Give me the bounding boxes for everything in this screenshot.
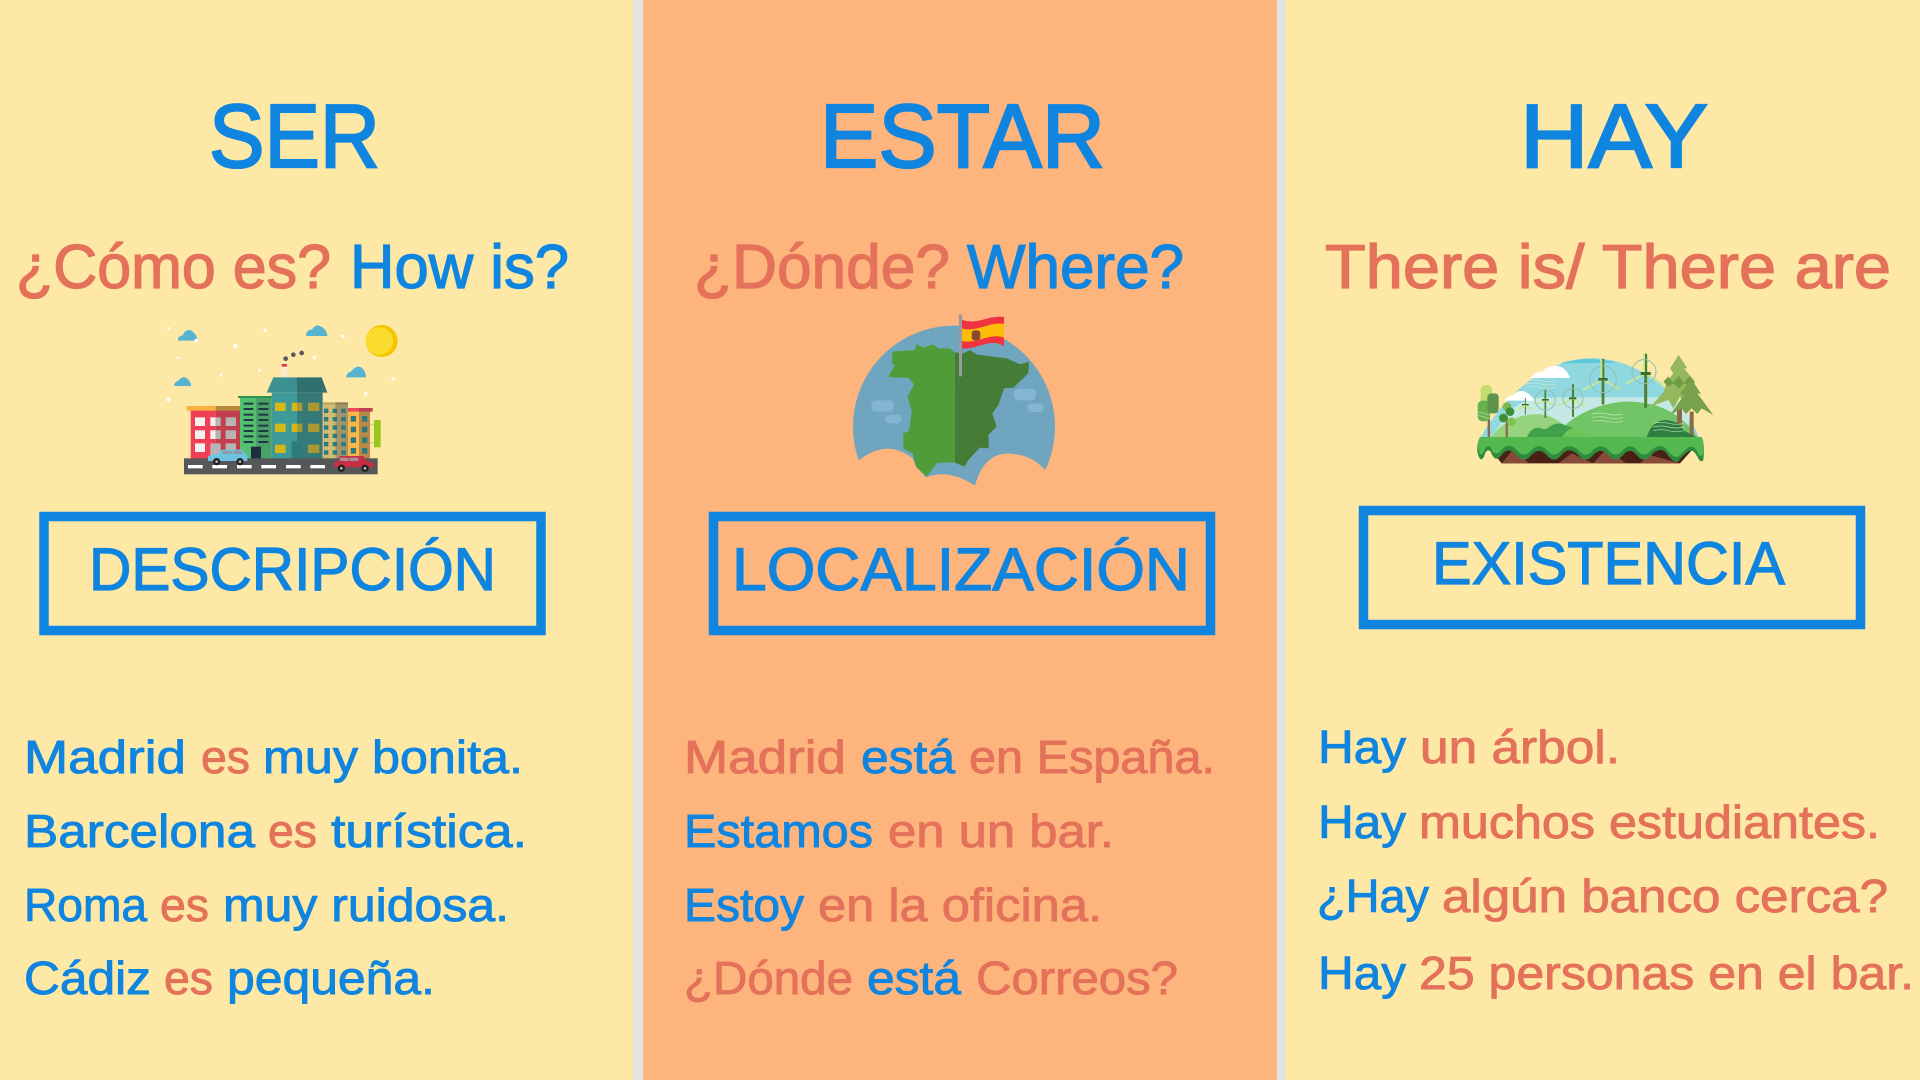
- wavy lines: [1469, 380, 1684, 432]
- examples: ser: es: [268, 805, 317, 857]
- examples: estar: ¿Dónde: [684, 952, 853, 1004]
- examples: estar: está: [861, 731, 955, 783]
- examples: ser: Cádiz: [24, 952, 151, 1004]
- examples: hay: Hay: [1318, 721, 1406, 773]
- grass top: [1477, 437, 1704, 462]
- question: where: Where?: [967, 233, 1184, 302]
- label box: localizacion: [714, 516, 1210, 630]
- label box: descripcion: [44, 516, 541, 630]
- question: where: [694, 233, 1184, 302]
- examples: estar: en España.: [969, 731, 1215, 783]
- label box: descripcion: DESCRIPCIÓN: [89, 536, 496, 603]
- label box: existencia: EXISTENCIA: [1432, 530, 1785, 597]
- examples: ser: pequeña.: [227, 952, 435, 1004]
- question: how is: How is?: [350, 233, 569, 302]
- icon: spain globe: [843, 314, 1063, 535]
- examples: ser: Barcelona: [24, 805, 255, 857]
- panel: estar: [643, 0, 1277, 1080]
- title: SER: SER: [209, 87, 380, 187]
- label box: localizacion: LOCALIZACIÓN: [732, 536, 1190, 603]
- examples: hay: 25 personas en el bar.: [1419, 947, 1914, 999]
- examples: ser: turística.: [331, 805, 527, 857]
- left trees: [1488, 410, 1490, 438]
- examples: ser: Madrid: [24, 731, 186, 783]
- title: HAY: HAY: [1520, 87, 1708, 187]
- examples: ser: es: [164, 952, 213, 1004]
- examples: hay: muchos estudiantes.: [1419, 796, 1880, 848]
- examples: estar: [684, 731, 1215, 1004]
- icon: city: [166, 325, 398, 474]
- blue car: [208, 450, 247, 461]
- examples: estar: en la oficina.: [818, 879, 1102, 931]
- examples: ser: muy bonita.: [263, 731, 523, 783]
- panel: ser: [0, 0, 633, 1080]
- divider left: [633, 0, 643, 1080]
- red building: [191, 410, 216, 459]
- examples: estar: Madrid: [684, 731, 846, 783]
- examples: hay: Hay: [1318, 796, 1406, 848]
- panel: hay: [1286, 0, 1920, 1080]
- examples: estar: Estamos: [684, 805, 873, 857]
- question: where: ¿Dónde?: [694, 233, 950, 302]
- question: how is: ¿Cómo es?: [16, 233, 331, 302]
- examples: ser: es: [160, 879, 209, 931]
- soil: [1488, 447, 1695, 463]
- examples: ser: es: [201, 731, 250, 783]
- examples: hay: ¿Hay: [1317, 870, 1429, 922]
- red car: [334, 456, 374, 467]
- teal building: [272, 393, 297, 459]
- divider right: [1277, 0, 1286, 1080]
- bushes: [1527, 423, 1591, 438]
- orange building: [348, 411, 359, 459]
- label box: existencia: [1364, 510, 1860, 624]
- icon: green landscape: [1469, 354, 1713, 463]
- examples: ser: [24, 731, 527, 1004]
- examples: hay: [1317, 721, 1914, 999]
- green building: [240, 397, 256, 459]
- tan building: [323, 404, 335, 459]
- title: ESTAR: ESTAR: [820, 87, 1105, 187]
- examples: hay: un árbol.: [1420, 721, 1620, 773]
- examples: estar: está: [867, 952, 961, 1004]
- examples: ser: muy ruidosa.: [223, 879, 509, 931]
- pine trees: [1677, 408, 1682, 438]
- examples: estar: en un bar.: [888, 805, 1114, 857]
- question: there is: There is/ There are: [1325, 233, 1891, 302]
- question: how is: [16, 233, 569, 302]
- examples: ser: Roma: [24, 879, 147, 931]
- road: [184, 458, 378, 474]
- examples: estar: Correos?: [976, 952, 1178, 1004]
- examples: hay: Hay: [1318, 947, 1406, 999]
- examples: hay: algún banco cerca?: [1442, 870, 1888, 922]
- examples: estar: Estoy: [684, 879, 804, 931]
